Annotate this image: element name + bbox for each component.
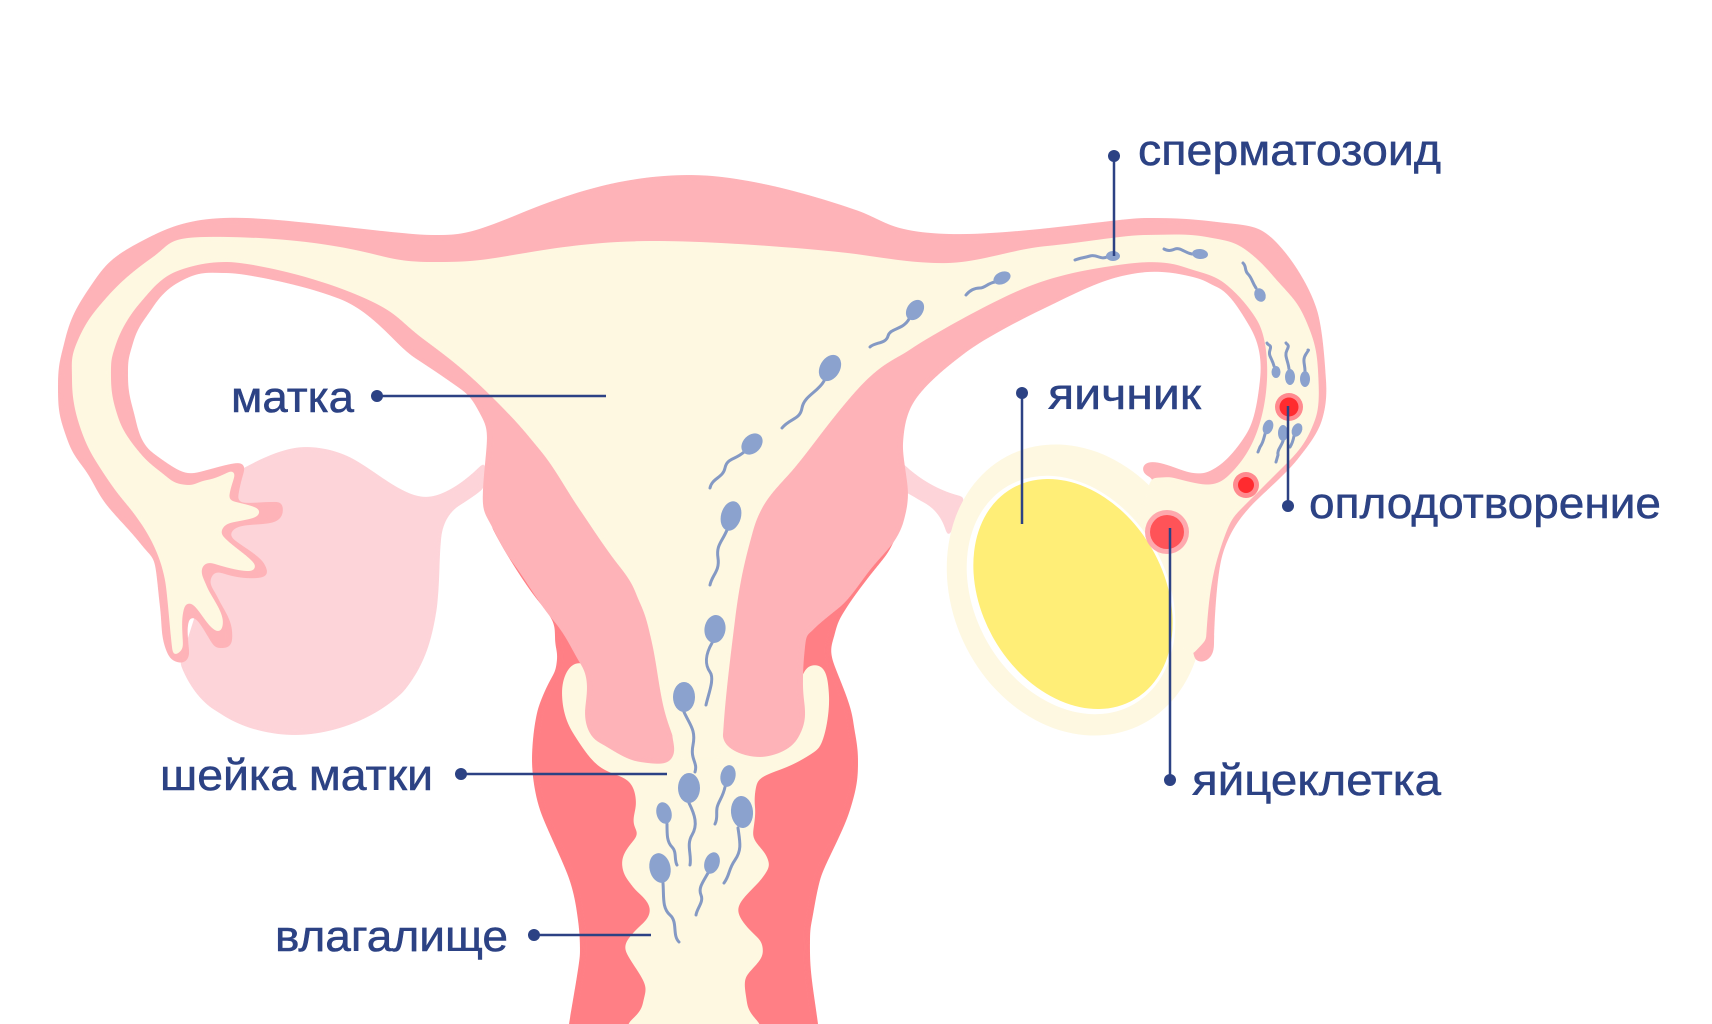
right ovary ligament <box>895 455 965 540</box>
right ovary capsule <box>900 402 1250 778</box>
label: оплодотворение: оплодотворение <box>1309 479 1661 528</box>
label: влагалище <box>275 912 651 961</box>
sperm 14 <box>710 499 745 585</box>
label: матка <box>231 373 606 422</box>
sperm 10 <box>1258 418 1275 452</box>
label: влагалище: влагалище <box>275 912 508 961</box>
egg in tube <box>1233 472 1259 498</box>
label: матка: матка <box>231 373 355 422</box>
label: сперматозоид: сперматозоид <box>1138 126 1441 175</box>
sperm 18 <box>715 764 738 824</box>
fertilized egg <box>1275 393 1303 421</box>
uterus and tubes muscle wall <box>58 175 1326 764</box>
vagina and outer muscle wall <box>490 523 900 1024</box>
label: яичник <box>1016 370 1202 524</box>
sperm 13 <box>710 429 767 488</box>
label: яйцеклетка <box>1164 528 1442 805</box>
sperm 22 <box>696 850 723 915</box>
label: шейка матки <box>160 751 667 800</box>
label: сперматозоид <box>1108 126 1441 256</box>
label: яичник: яичник <box>1048 370 1202 419</box>
right ovary: yellow body with white ring <box>925 438 1217 752</box>
label: яйцеклетка: яйцеклетка <box>1192 756 1442 805</box>
sperm 5 <box>1164 248 1208 260</box>
sperm 4 <box>1075 251 1120 261</box>
sperm 7 <box>1267 343 1280 378</box>
sperm 12 <box>1290 422 1304 447</box>
sperm 1 <box>782 351 846 428</box>
sperm 19 <box>724 795 754 883</box>
sperm 3 <box>966 269 1013 295</box>
sperm 20 <box>654 800 677 865</box>
sperm 9 <box>1300 350 1310 387</box>
vaginal canal and cervical fornix <box>562 663 829 1024</box>
sperm 11 <box>1276 425 1288 462</box>
label: оплодотворение <box>1282 406 1661 528</box>
sperm 21 <box>647 851 679 942</box>
sperm 15 <box>703 614 727 705</box>
uterine cavity and fallopian tubes <box>72 234 1319 760</box>
sperm 8 <box>1285 343 1295 385</box>
sperm 17 <box>678 773 700 865</box>
sperm 2 <box>870 296 928 347</box>
sperm 16 <box>673 682 696 772</box>
label: шейка матки: шейка матки <box>160 751 433 800</box>
egg at ovary <box>1145 510 1189 554</box>
sperm 6 <box>1243 263 1268 304</box>
sperm cells <box>647 248 1310 942</box>
left ovary <box>180 447 486 735</box>
